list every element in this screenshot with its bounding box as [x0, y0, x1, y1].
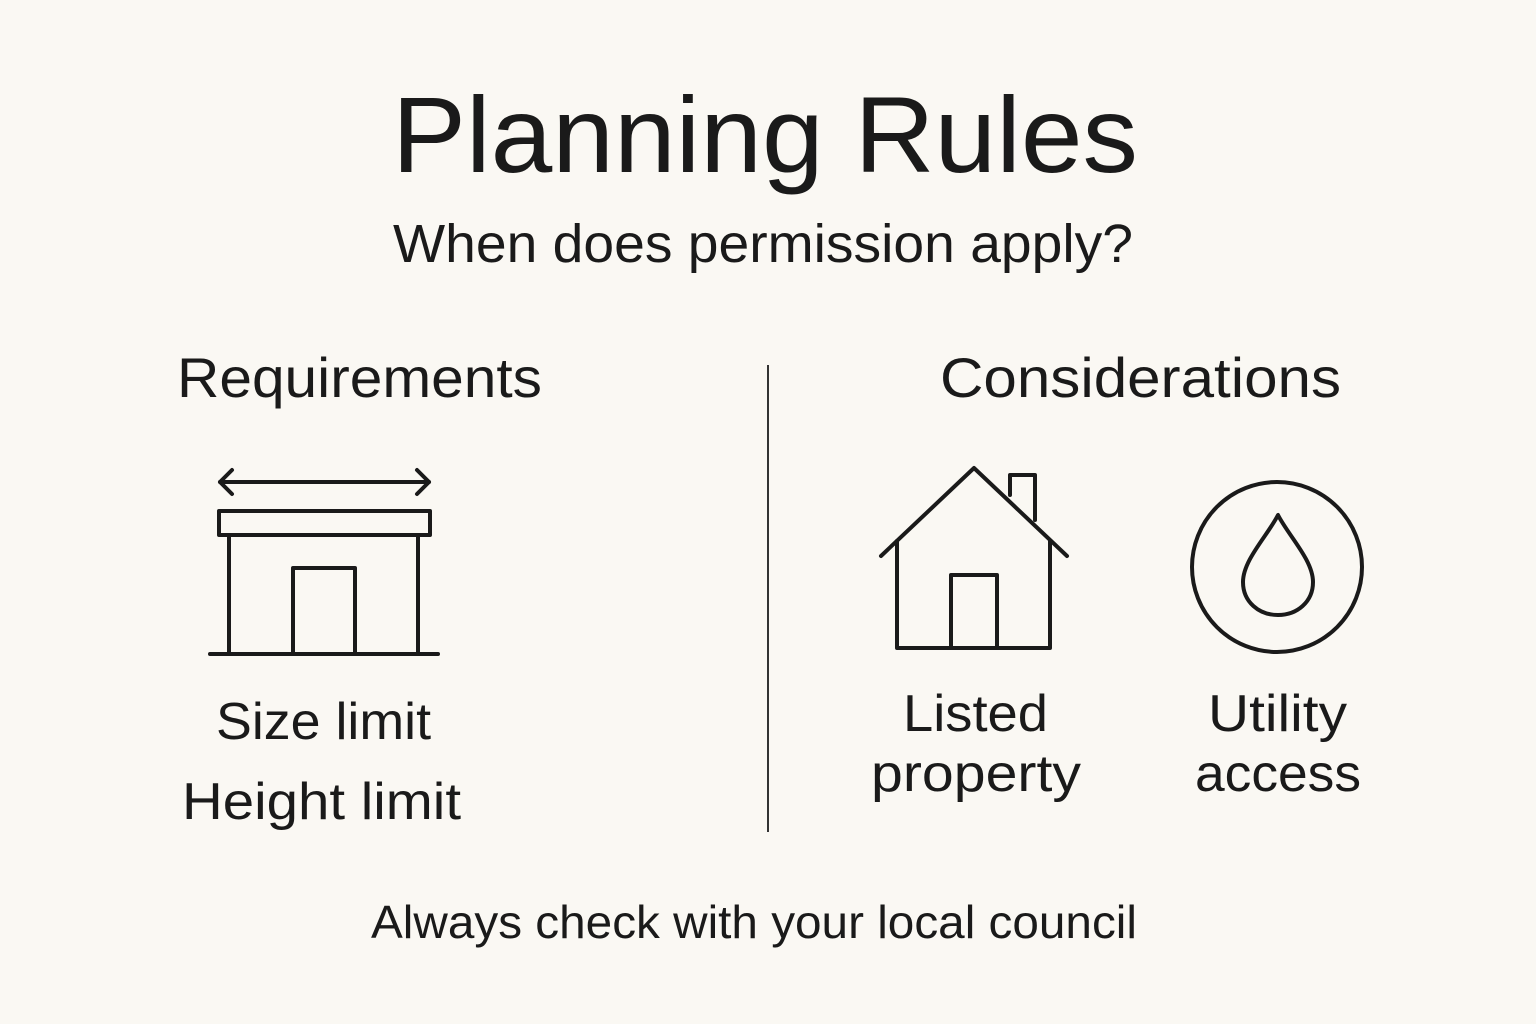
- label: listed property: [871, 685, 1081, 803]
- icon: water drop in circle: [1192, 482, 1362, 652]
- label: utility access: Utility: [1208, 685, 1347, 743]
- heading: considerations: Considerations: [940, 346, 1341, 409]
- footer note: Always check with your local council: [371, 896, 1137, 948]
- label: utility access: access: [1195, 745, 1361, 803]
- label: listed property: property: [871, 745, 1081, 803]
- heading: requirements: Requirements: [177, 346, 542, 409]
- text: size and height limits: [182, 693, 462, 831]
- icon: house: [881, 468, 1067, 648]
- text: size and height limits: Height limit: [182, 773, 462, 831]
- label: listed property: Listed: [903, 685, 1048, 743]
- icon: building with width arrow: [210, 470, 438, 654]
- label: utility access: [1195, 685, 1361, 803]
- title: Planning Rules: [392, 74, 1138, 195]
- subtitle: When does permission apply?: [393, 214, 1133, 274]
- text: size and height limits: Size limit: [216, 693, 432, 751]
